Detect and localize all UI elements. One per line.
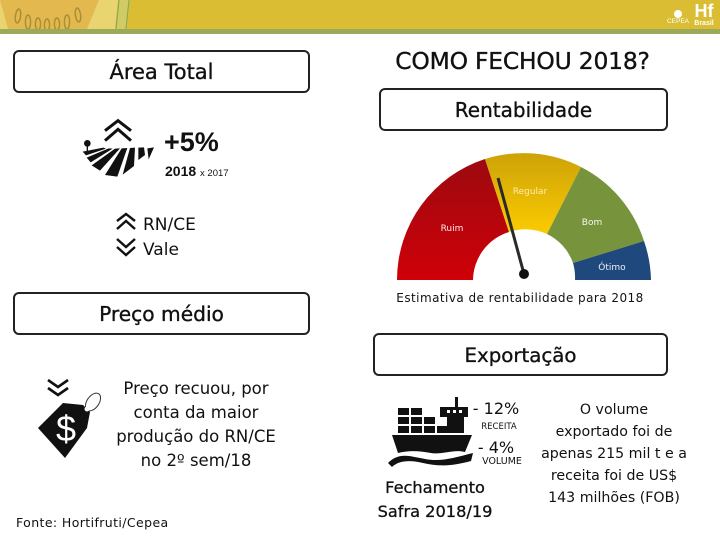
logo: Cepea	[667, 10, 689, 25]
text: preço recuou: produção do RN/CE	[116, 427, 276, 446]
icon: price tag with down arrows: $	[56, 408, 76, 449]
gauge chart: Ruim	[441, 224, 463, 234]
header banner	[0, 0, 720, 34]
stat: -4% volume: - 4%	[478, 438, 514, 457]
icon: up arrows	[116, 212, 136, 230]
text: fechamento safra: Safra 2018/19	[378, 502, 492, 521]
stat: +5%: +5%	[164, 127, 219, 157]
panel heading: Rentabilidade	[379, 88, 668, 131]
text: fechamento safra: Fechamento	[385, 478, 485, 497]
text: export volume: O volume	[580, 402, 648, 418]
label: Vale: Vale	[143, 240, 179, 260]
panel heading: Preço médio	[13, 292, 310, 335]
panel heading: Preço médio: Preço médio	[99, 302, 224, 326]
text: export volume: 143 milhões (FOB)	[548, 490, 680, 506]
icon: container ship	[388, 397, 473, 467]
text: export volume: apenas 215 mil t e a	[541, 446, 687, 462]
gauge chart: Regular	[513, 187, 548, 197]
icon: down arrows	[116, 238, 136, 257]
text: export volume: receita foi de US$	[551, 468, 677, 484]
logo: Cepea: CEPEA	[667, 18, 689, 25]
label: RN/CE: RN/CE	[143, 215, 196, 235]
panel heading: Área Total: Área Total	[109, 60, 214, 84]
text: preço recuou: conta da maior	[134, 403, 258, 422]
heading: Como fechou 2018: COMO FECHOU 2018?	[395, 47, 650, 75]
text: export volume	[541, 402, 687, 506]
stat caption: 2018 x 2017: 2018 x 2017	[165, 163, 229, 179]
source: Fonte: Hortifruti/Cepea	[16, 515, 169, 530]
gauge caption: Estimativa de rentabilidade para 2018	[396, 291, 644, 305]
text: preço recuou	[116, 379, 276, 470]
panel heading: Exportação	[373, 333, 668, 376]
text: export volume: exportado foi de	[556, 424, 672, 440]
panel heading: Exportação: Exportação	[464, 344, 576, 367]
label: receita: RECEITA	[481, 422, 517, 432]
logo: Hf Brasil: Brasil	[694, 20, 714, 27]
icon: field with up arrows	[82, 118, 154, 177]
panel heading: Rentabilidade: Rentabilidade	[455, 98, 592, 122]
panel heading: Área Total	[13, 50, 310, 93]
label: volume: VOLUME	[482, 456, 522, 467]
gauge chart: Ótimo	[598, 261, 626, 273]
icon: price tag with down arrows	[38, 378, 102, 458]
gauge chart: Bom	[582, 218, 602, 228]
text: preço recuou: Preço recuou, por	[123, 379, 269, 398]
stat: -12% receita: - 12%	[473, 399, 519, 418]
logo: Hf Brasil: Hf	[694, 1, 714, 21]
text: fechamento safra	[378, 478, 492, 521]
text: preço recuou: no 2º sem/18	[141, 451, 251, 470]
